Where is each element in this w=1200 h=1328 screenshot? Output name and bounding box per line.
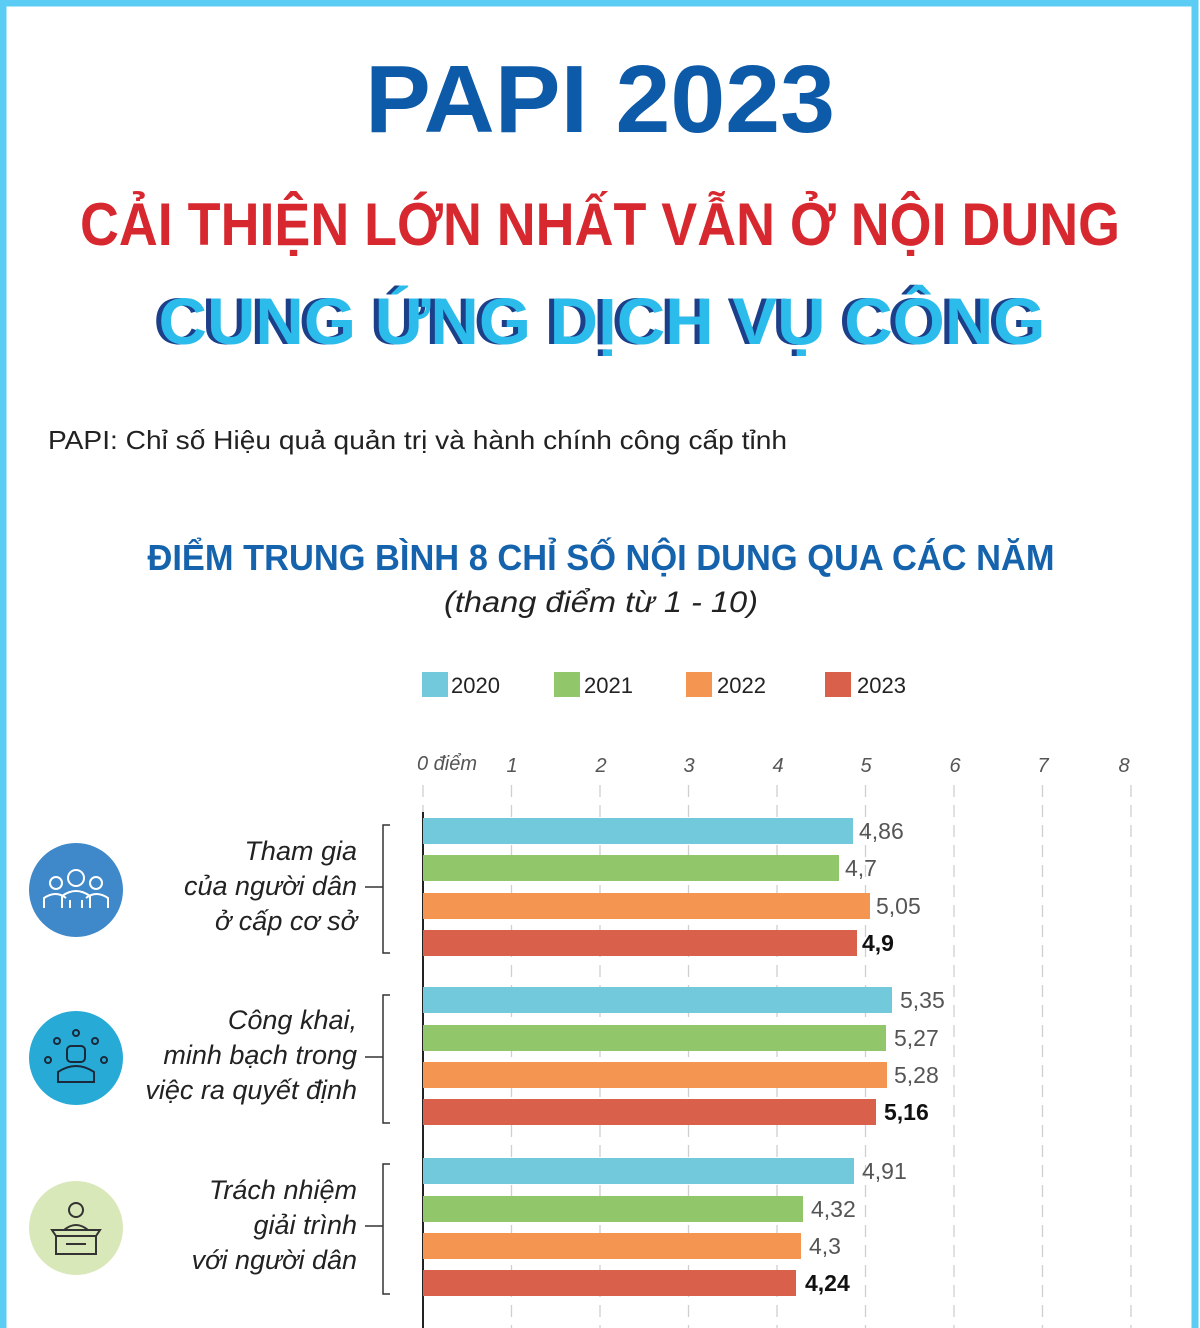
label: giải trình: [253, 1210, 357, 1240]
axis labels: 4: [772, 755, 784, 777]
chart title: ĐIỂM TRUNG BÌNH 8 CHỈ SỐ NỘI DUNG QUA CÁC NĂM: [148, 536, 1054, 578]
chart scale note: (thang điểm từ 1 - 10): [444, 586, 758, 619]
label: ở cấp cơ sở: [215, 906, 360, 936]
axis labels: 6: [949, 755, 961, 777]
label: việc ra quyết định: [145, 1075, 357, 1105]
group 3: Trách nhiệm: 4,24: [805, 1270, 850, 1296]
subtitle cyan: CUNG ỨNG DỊCH VỤ CÔNG: [158, 284, 1046, 358]
label: [192, 1175, 357, 1275]
axis labels: 3: [683, 755, 695, 777]
icon: people: [29, 843, 123, 937]
group 2: Công khai: 5,16: [884, 1099, 929, 1125]
group 3: Trách nhiệm: 4,32: [811, 1196, 856, 1222]
title: PAPI 2023: [365, 46, 835, 153]
axis labels: 5: [860, 755, 872, 777]
group 2: Công khai: 5,28: [894, 1062, 939, 1088]
label: của người dân: [184, 871, 357, 901]
group 2: Công khai: 5,35: [900, 987, 945, 1013]
icon: speaker: [29, 1181, 123, 1275]
legend: 2020: [451, 673, 500, 698]
group 2: Công khai: 5,27: [894, 1025, 939, 1051]
legend: 2023: [857, 673, 906, 698]
bracket: [365, 1164, 390, 1294]
group 1: Tham gia: [29, 818, 921, 956]
group 2: Công khai: [29, 987, 945, 1125]
axis labels: 0 điểm: [417, 753, 477, 775]
subtitle cyan: CUNG ỨNG DỊCH VỤ CÔNG: [154, 284, 1040, 358]
bars: [423, 818, 853, 844]
label: [184, 836, 360, 936]
label: Trách nhiệm: [209, 1175, 357, 1205]
label: [145, 1005, 357, 1105]
group 3: Trách nhiệm: [29, 1158, 907, 1296]
bars: [423, 987, 892, 1013]
group 3: Trách nhiệm: 4,3: [809, 1233, 841, 1259]
legend: [422, 672, 906, 698]
axis labels: 8: [1118, 755, 1130, 777]
axis labels: [417, 753, 1130, 777]
label: minh bạch trong: [163, 1040, 357, 1070]
bracket: [365, 995, 390, 1123]
axis labels: 2: [594, 755, 607, 777]
label: Công khai,: [228, 1005, 357, 1035]
axis labels: 1: [506, 755, 518, 777]
legend: 2022: [717, 673, 766, 698]
group 1: Tham gia: 4,7: [845, 855, 877, 881]
legend: 2021: [584, 673, 633, 698]
label: Tham gia: [244, 836, 357, 866]
definition text: PAPI: Chỉ số Hiệu quả quản trị và hành chính công cấp tỉnh: [48, 425, 787, 455]
bars: [423, 1158, 854, 1184]
group 3: Trách nhiệm: 4,91: [862, 1158, 907, 1184]
axis labels: 7: [1037, 755, 1049, 777]
bracket: [365, 825, 390, 953]
label: với người dân: [192, 1245, 357, 1275]
group 1: Tham gia: 4,86: [859, 818, 904, 844]
group 1: Tham gia: 5,05: [876, 893, 921, 919]
icon: transparency: [29, 1011, 123, 1105]
axis line: [422, 812, 424, 1328]
group 1: Tham gia: 4,9: [862, 930, 894, 956]
